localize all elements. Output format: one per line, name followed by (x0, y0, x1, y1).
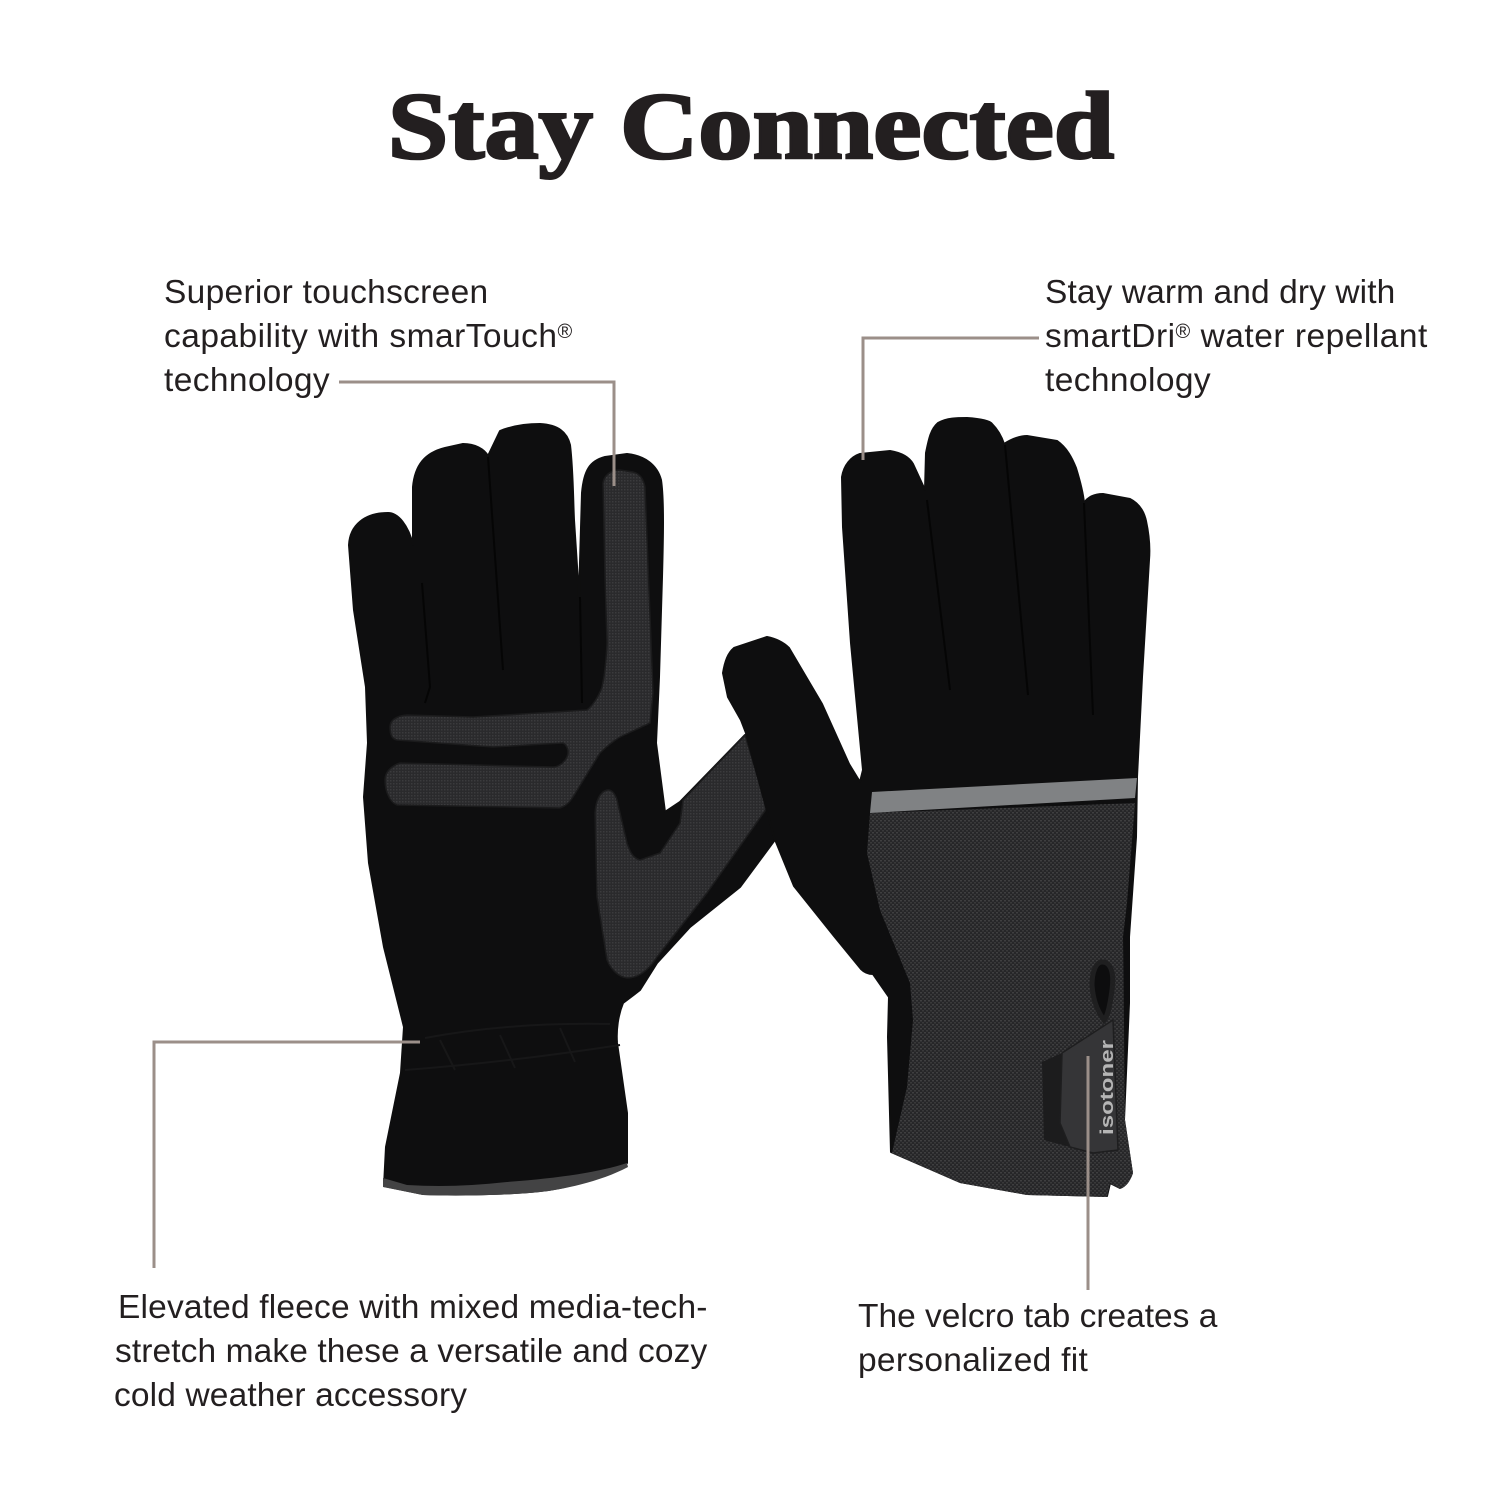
brand text on tab: isotoner (1097, 1040, 1117, 1135)
arrow: water repellant leader (863, 338, 1039, 460)
icon: finger seams (927, 445, 1093, 715)
text block: water repellant: Stay warm and dry with (1045, 274, 1395, 311)
icon: heathered knit cuff (867, 803, 1135, 1197)
text block: touchscreen: capability with smarTouch® (164, 318, 573, 355)
text block: fleece: Elevated fleece with mixed media-tech- (118, 1289, 708, 1326)
text block: fleece (114, 1289, 708, 1414)
text block: fleece: stretch make these a versatile and cozy (115, 1333, 707, 1370)
icon: right glove, back view (723, 418, 1149, 1197)
icon: tab face (1060, 1020, 1118, 1153)
icon: cuff gathers (405, 1024, 620, 1070)
arrow: touchscreen leader (339, 382, 614, 486)
text block: water repellant (1045, 274, 1428, 399)
icon: finger seams (422, 457, 582, 703)
arrow: fleece leader (154, 1042, 420, 1268)
text block: water repellant: technology (1045, 362, 1211, 399)
title: Stay Connected (388, 73, 1114, 179)
leader lines (154, 338, 1088, 1290)
text block: water repellant: smartDri® water repellant (1045, 318, 1428, 355)
text block: touchscreen (164, 274, 573, 399)
text block: velcro tab: The velcro tab creates a (858, 1298, 1217, 1335)
icon: tab backing (1042, 1053, 1070, 1147)
icon: velcro tab (1042, 962, 1118, 1153)
text block: velcro tab: personalized fit (858, 1342, 1088, 1379)
icon: reflective stripe (870, 778, 1137, 813)
icon: cuff trim (383, 1163, 628, 1196)
icon: thumb palm grip (595, 735, 767, 978)
text block: touchscreen: technology (164, 362, 330, 399)
icon: left glove, palm view (349, 424, 790, 1196)
text block: fleece: cold weather accessory (114, 1377, 467, 1414)
icon: index and palm touchscreen grip (385, 470, 653, 808)
text block: velcro tab (858, 1298, 1218, 1379)
icon: tab slit (1092, 962, 1113, 1020)
text block: touchscreen: Superior touchscreen (164, 274, 488, 311)
arrow: velcro leader (1086, 1056, 1090, 1290)
